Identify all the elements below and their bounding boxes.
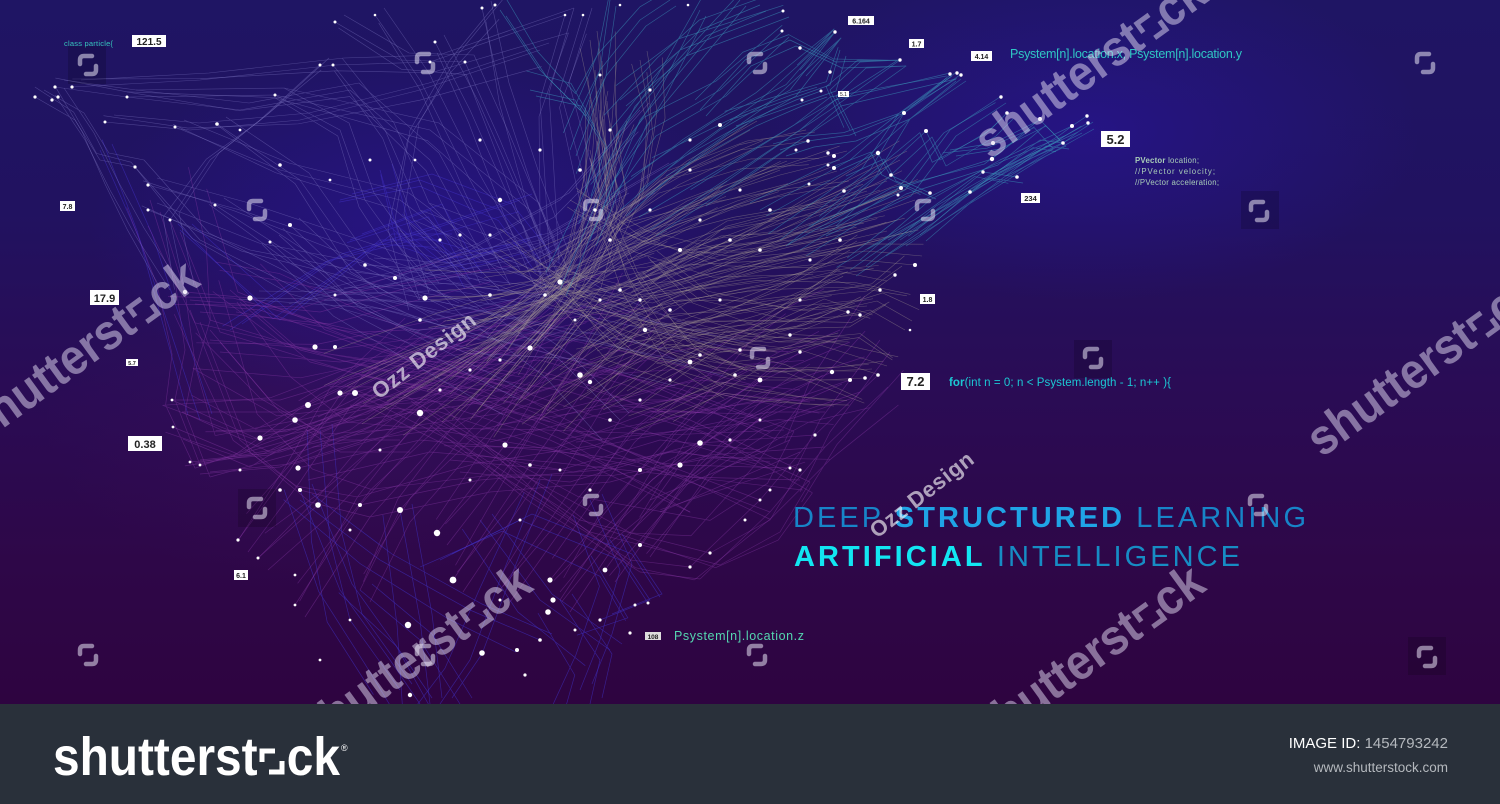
data label: 7.2: 7.2: [906, 374, 925, 389]
data label: 4.14: [971, 51, 992, 61]
code: PVector block: [1135, 156, 1219, 187]
network: purple strands lower left: [127, 156, 916, 634]
data label: 1.7: 1.7: [912, 42, 921, 48]
network: nodes: [33, 4, 1090, 697]
data label: 5.1: 5.1: [840, 92, 847, 98]
data label: 1.8: 1.8: [923, 297, 932, 304]
data label: 0.38: [128, 436, 162, 451]
data label: 0.38: 0.38: [134, 439, 156, 451]
data label: 5.2: [1101, 131, 1130, 147]
network: teal strands upper right: [486, 0, 1094, 300]
footer bar: [0, 704, 1500, 804]
data label: 234: [1021, 193, 1040, 203]
data label: 234: 234: [1024, 194, 1038, 203]
data label: 1.8: [920, 294, 935, 304]
data label: 121.5: 121.5: [136, 37, 162, 48]
heading: deep structured learning: DEEP STRUCTURED LEARNING: [793, 502, 1306, 534]
heading: artificial intelligence: ARTIFICIAL INTELLIGENCE: [794, 541, 1240, 573]
watermark: Ozz Design centre: Ozz Design: [367, 307, 481, 404]
data label: 7.8: [60, 201, 75, 211]
data label: 17.9: 17.9: [94, 293, 115, 305]
data label: 6.1: [234, 570, 248, 580]
data label: 6.164: [848, 16, 874, 26]
code: location x and y: Psystem[n].location.x, Psystem[n].location.y: [1010, 47, 1243, 61]
data label: 4.14: 4.14: [975, 54, 988, 61]
data label: 5.1: [838, 91, 849, 98]
network: tan strands centre: [321, 1, 938, 450]
data label: 17.9: [90, 290, 119, 305]
code: PVector block: PVector location;: [1135, 156, 1199, 165]
watermark: Ozz Design right: Ozz Design: [865, 446, 979, 543]
data label: 5.7: [126, 359, 138, 367]
code: PVector block: //PVector acceleration;: [1135, 178, 1219, 187]
code: for loop: for(int n = 0; n < Psystem.length - 1; n++ ){: [949, 377, 1171, 389]
watermark: logo marks: [68, 46, 1446, 675]
code: location z: Psystem[n].location.z: [674, 629, 804, 643]
data label: 121.5: [132, 35, 166, 48]
data label: 1.7: [909, 39, 924, 48]
footer logo: shutterstock wordmark: shutterstock: [53, 727, 341, 787]
data label: 7.2: [901, 373, 930, 390]
footer: image id: IMAGE ID: 1454793242: [1289, 735, 1448, 752]
data label: 5.7: 5.7: [128, 361, 136, 367]
code: class particle: class particle{: [64, 39, 113, 48]
data label: 108: 108: [648, 634, 659, 641]
network: deep blue strands bottom: [73, 140, 662, 722]
footer logo: shutterstock wordmark: ®: [341, 743, 348, 753]
code: PVector block: //PVector velocity;: [1135, 167, 1215, 176]
data label: 5.2: 5.2: [1106, 132, 1125, 147]
footer: website: www.shutterstock.com: [1313, 760, 1448, 775]
data label: 6.1: 6.1: [236, 573, 246, 580]
data label: 108: [645, 632, 661, 641]
data label: 6.164: 6.164: [852, 18, 870, 26]
network: lavender strands upper left: [18, 0, 749, 446]
data label: 7.8: 7.8: [63, 204, 72, 211]
